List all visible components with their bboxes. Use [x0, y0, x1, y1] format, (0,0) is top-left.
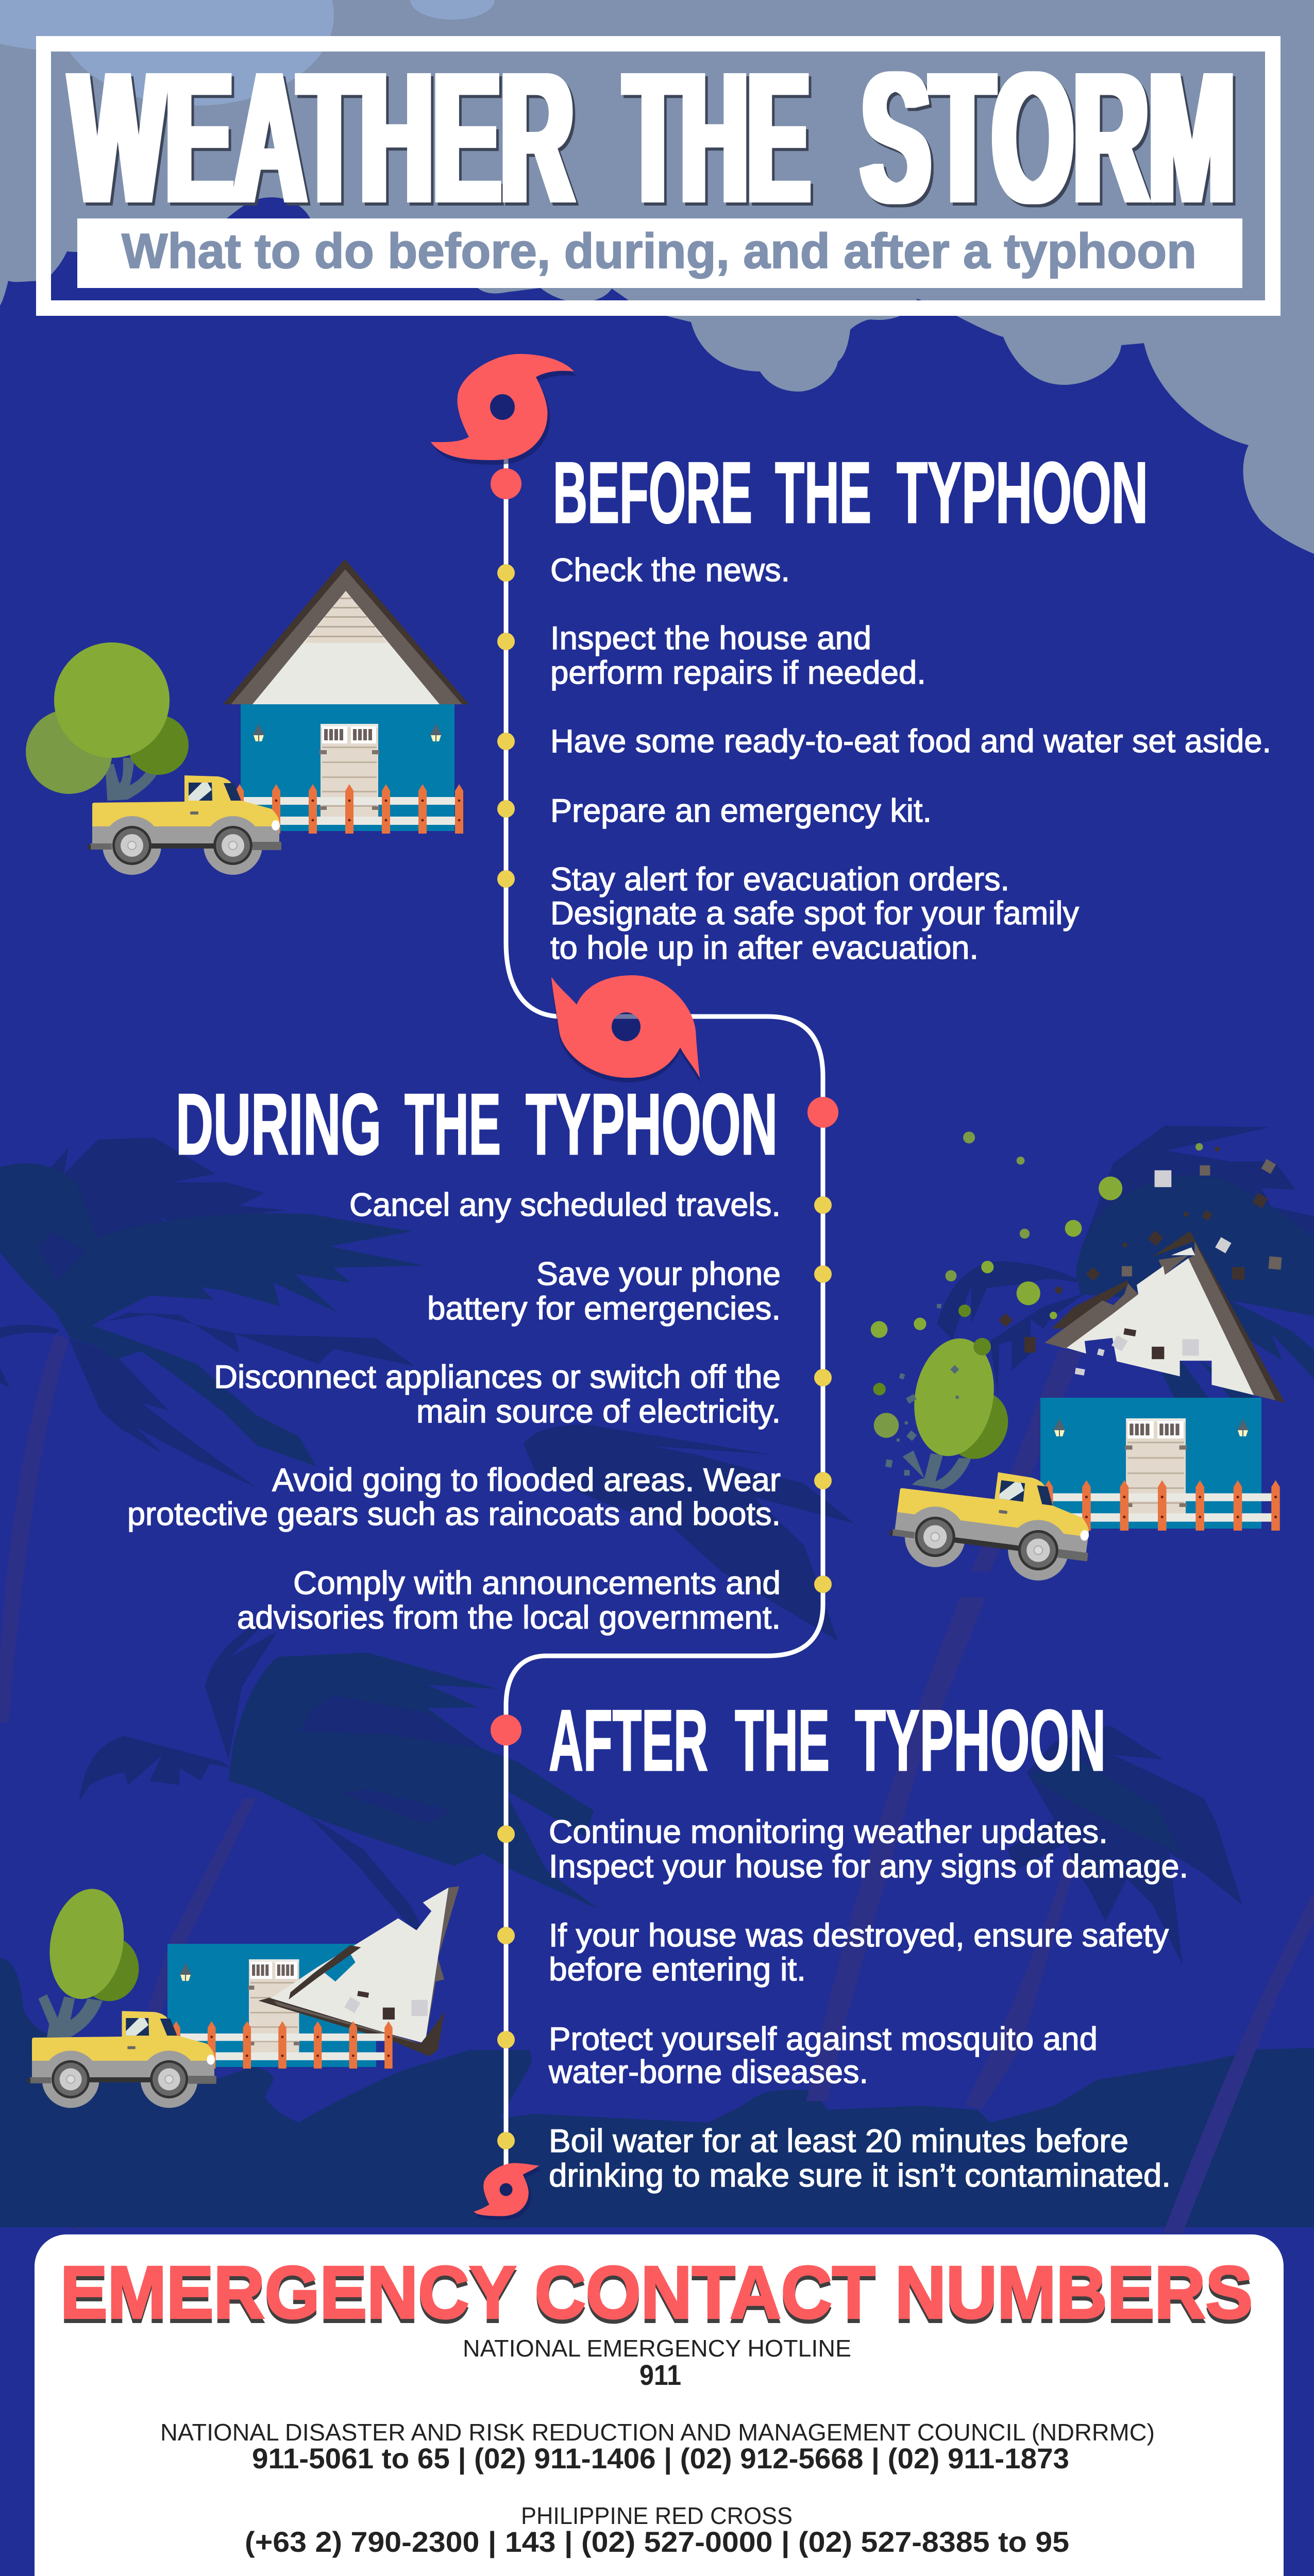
checklist: during: Comply with announcements and: [293, 1565, 781, 1601]
contact: red cross: (+63 2) 790-2300 | 143 | (02) 527-0000 | (02) 527-8385 to 95: [245, 2526, 1069, 2558]
heading: before: BEFORE: [553, 444, 752, 541]
heading: before: [553, 444, 1148, 541]
checklist: during: Disconnect appliances or switch off the: [214, 1359, 781, 1395]
subtitle: What to do before, during, and after a typhoon: [122, 224, 1197, 279]
bent tree: [885, 1304, 1019, 1489]
panel: emergency contacts: [35, 2234, 1284, 2576]
checklist: during: Save your phone: [536, 1256, 781, 1292]
checklist: before: perform repairs if needed.: [550, 655, 926, 691]
contact: national emergency: NATIONAL EMERGENCY HOTLINE: [463, 2335, 851, 2362]
contact: national emergency: 911: [639, 2359, 681, 2391]
checklist: after: [548, 1814, 1188, 2194]
checklist: after: before entering it.: [549, 1952, 806, 1988]
checklist: after: If your house was destroyed, ensure safety: [549, 1918, 1169, 1954]
storm clouds: [0, 0, 1314, 554]
contact: national emergency: [463, 2335, 851, 2391]
heading: before: TYPHOON: [897, 444, 1148, 541]
checklist: before: Have some ready-to-eat food and water set aside.: [550, 723, 1271, 759]
checklist: during: Avoid going to flooded areas. Wear: [272, 1462, 781, 1498]
flying leaves: [871, 1131, 1203, 1438]
palm silhouette: behind storm-damaged house: [937, 1126, 1314, 1571]
bullet markers: [497, 1825, 515, 2149]
pickup: [88, 775, 281, 875]
heading: during: TYPHOON: [526, 1076, 778, 1173]
icon: typhoon top: [431, 354, 577, 465]
contact: NDRRMC: NATIONAL DISASTER AND RISK REDUCTION AND MANAGEMENT COUNCIL (NDRRMC): [160, 2419, 1155, 2446]
checklist: before: [550, 552, 1271, 966]
tilted pickup: [886, 1460, 1097, 1587]
heading: emergency contact numbers: EMERGENCY CONTACT NUMBERS: [60, 2251, 1253, 2334]
checklist: after: Boil water for at least 20 minutes before: [549, 2123, 1128, 2159]
title frame: [36, 36, 1281, 316]
heading: during: [176, 1076, 778, 1173]
checklist: during: [127, 1187, 781, 1636]
heading: after: [549, 1692, 1106, 1789]
timeline path: [506, 453, 823, 2169]
illustration: intact house, tree and pickup: [26, 559, 469, 875]
checklist: after: Inspect your house for any signs of damage.: [549, 1849, 1188, 1885]
hedge silhouette: [0, 1958, 1314, 2227]
title: THE: [625, 33, 810, 242]
contact: red cross: PHILIPPINE RED CROSS: [521, 2502, 793, 2529]
heading: during: DURING: [176, 1076, 381, 1173]
fence: [1045, 1480, 1280, 1531]
collapsed roof: [259, 1886, 459, 2056]
checklist: during: advisories from the local government.: [237, 1600, 781, 1636]
heading: after: AFTER: [549, 1692, 708, 1789]
title: WEATHER: [70, 33, 574, 242]
checklist: during: battery for emergencies.: [427, 1291, 781, 1327]
checklist: before: Prepare an emergency kit.: [550, 793, 932, 829]
tree: [26, 642, 189, 801]
heading: emergency contact numbers: EMERGENCY CONTACT NUMBERS: [60, 2255, 1253, 2338]
panel: during the typhoon: [127, 1076, 838, 1636]
icon: typhoon bottom: [474, 2163, 542, 2219]
ruined wall: [167, 1944, 376, 2067]
checklist: before: Inspect the house and: [550, 620, 871, 656]
checklist: after: Protect yourself against mosquito and: [549, 2021, 1098, 2057]
fence: [172, 2021, 393, 2069]
heading: during: THE: [405, 1076, 501, 1173]
checklist: before: Designate a safe spot for your family: [550, 895, 1079, 931]
section marker: [491, 468, 521, 499]
palm silhouette: centre: [524, 1425, 854, 1641]
contact: NDRRMC: 911-5061 to 65 | (02) 911-1406 | (02) 912-5668 | (02) 911-1873: [252, 2442, 1069, 2475]
checklist: before: to hole up in after evacuation.: [550, 930, 979, 966]
checklist: before: Stay alert for evacuation orders.: [550, 861, 1009, 897]
checklist: after: Continue monitoring weather updates.: [549, 1814, 1108, 1850]
panel background: [35, 2234, 1284, 2576]
fence: [235, 784, 463, 834]
checklist: before: Check the news.: [550, 552, 790, 588]
house walls: [1040, 1398, 1261, 1529]
section marker: [807, 1097, 838, 1128]
panel: after the typhoon: [491, 1692, 1188, 2194]
bullet markers: [814, 1196, 832, 1593]
palm silhouette: lower left: [77, 1614, 598, 2229]
heading: before: THE: [775, 444, 871, 541]
bullet markers: [497, 564, 515, 888]
contact: red cross: [245, 2502, 1069, 2558]
roof and debris: [999, 1146, 1285, 1403]
illustration: house in storm: [871, 1131, 1285, 1587]
heading: after: THE: [735, 1692, 830, 1789]
illustration: destroyed house: [27, 1883, 459, 2108]
pickup: [27, 2011, 216, 2108]
checklist: during: protective gears such as raincoats and boots.: [127, 1496, 781, 1532]
checklist: after: water-borne diseases.: [548, 2054, 868, 2090]
panel: before the typhoon: [491, 444, 1271, 966]
palm silhouette: lower right: [806, 1597, 1314, 2233]
checklist: during: Cancel any scheduled travels.: [349, 1187, 781, 1223]
checklist: after: drinking to make sure it isn’t contaminated.: [549, 2158, 1171, 2194]
icon: typhoon middle: [551, 975, 700, 1082]
house: [223, 559, 469, 831]
contact: NDRRMC: [160, 2419, 1155, 2475]
section marker: [491, 1715, 521, 1745]
tree: [39, 1883, 139, 2037]
checklist: during: main source of electricity.: [416, 1394, 781, 1430]
palm silhouette: left: [0, 1138, 425, 1723]
heading: after: TYPHOON: [855, 1692, 1106, 1789]
